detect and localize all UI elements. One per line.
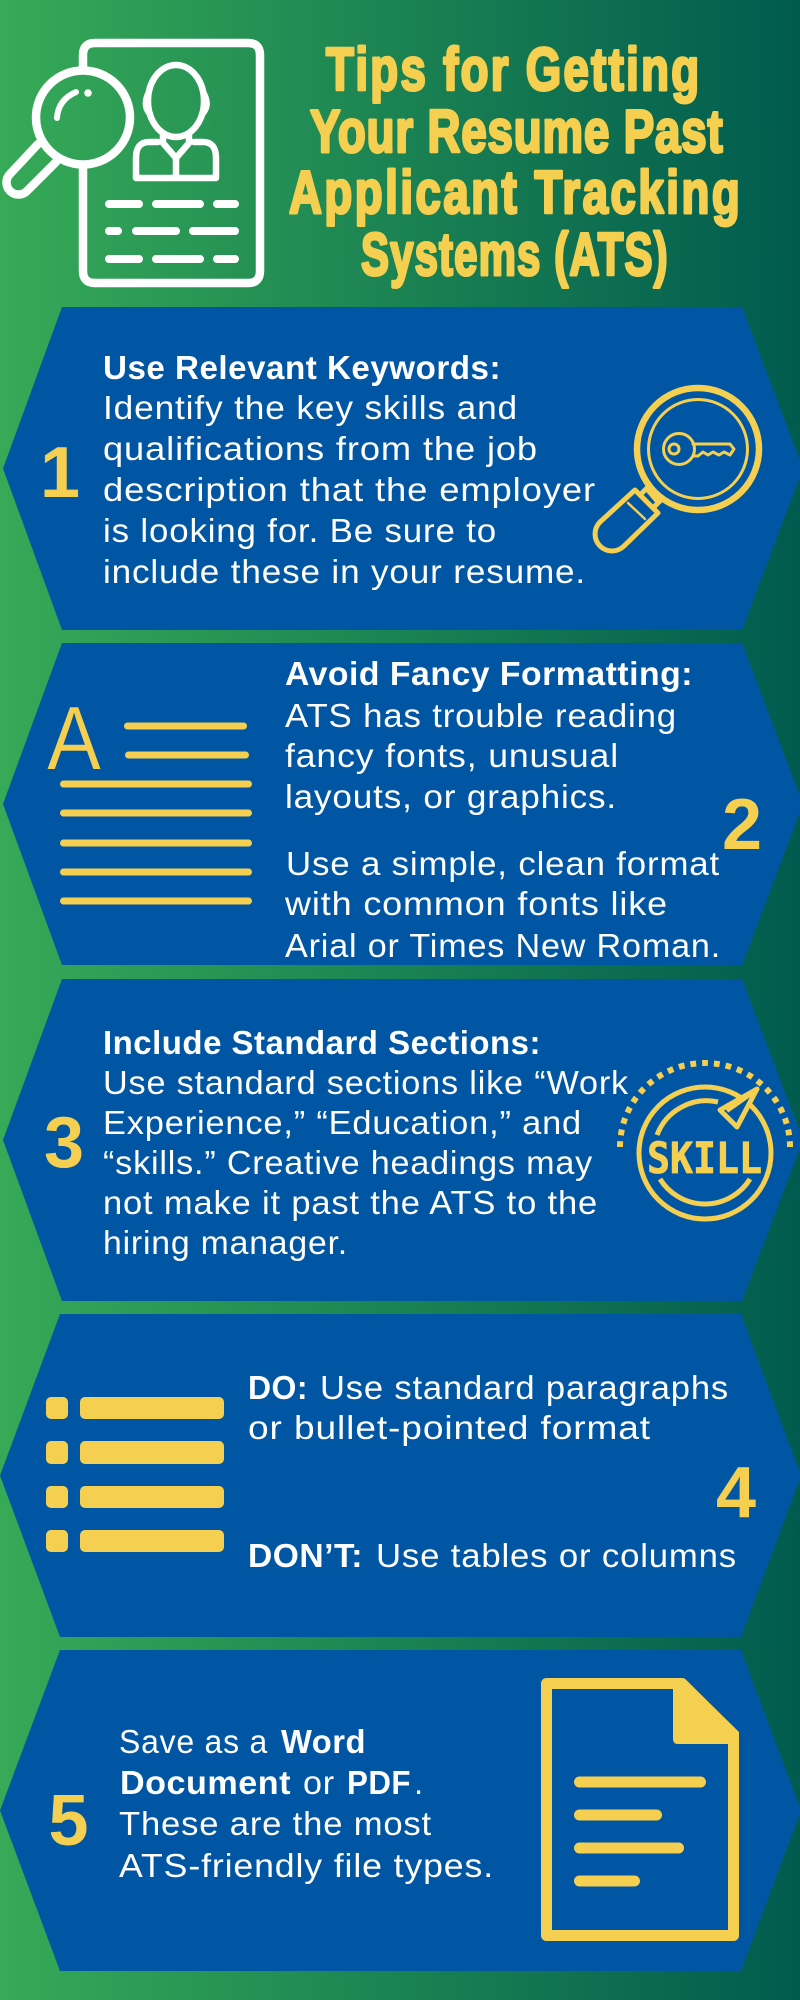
text: tip 1: qualifications from the job — [103, 430, 538, 467]
text: do: DO: — [248, 1369, 308, 1406]
text: tip 3: Include Standard Sections: — [103, 1024, 541, 1061]
text: do: or bullet-pointed format — [248, 1409, 651, 1446]
title: Your Resume Past — [310, 99, 723, 166]
icon: text lines with letter A — [47, 689, 248, 901]
text: tip 2: fancy fonts, unusual — [285, 737, 619, 774]
text: tip 1: Identify the key skills and — [103, 389, 518, 426]
text: don't: Use tables or columns — [376, 1537, 737, 1574]
title: Systems (ATS) — [361, 221, 668, 288]
number 5: 5 — [48, 1781, 89, 1861]
number 4: 4 — [716, 1453, 756, 1533]
icon: text lines with letter A: A — [47, 689, 101, 789]
icon: document — [546, 1680, 739, 1936]
text: tip 1 — [103, 349, 596, 590]
text: tip 2: with common fonts like — [284, 885, 668, 922]
text: tip 2 — [284, 655, 721, 964]
text: tip 3: hiring manager. — [103, 1224, 348, 1261]
icon: skill gauge — [620, 1063, 790, 1219]
title: Tips for Getting — [326, 37, 699, 104]
icon: bullet list — [46, 1397, 224, 1552]
text: tip 5: or — [303, 1764, 335, 1801]
text: tip 1: Use Relevant Keywords: — [103, 349, 501, 386]
text: tip 5: These are the most — [119, 1805, 432, 1842]
text: tip 5: . — [414, 1764, 424, 1801]
title — [289, 37, 740, 288]
panel 4 hexagon — [0, 1314, 800, 1637]
text: tip 3: not make it past the ATS to the — [103, 1184, 598, 1221]
panel 3 hexagon — [3, 979, 800, 1301]
text: tip 5: Save as a — [119, 1723, 268, 1760]
text: tip 2: Avoid Fancy Formatting: — [285, 655, 693, 692]
text: tip 2: Use a simple, clean format — [286, 845, 720, 882]
text: tip 5: PDF — [347, 1764, 411, 1801]
text: tip 5: ATS-friendly file types. — [119, 1847, 494, 1884]
panel 2 hexagon — [3, 643, 800, 965]
panel 5 hexagon — [0, 1650, 800, 1971]
icon: resume with magnifying glass — [6, 43, 260, 283]
text: tip 2: ATS has trouble reading — [285, 697, 677, 734]
text: tip 3 — [103, 1024, 629, 1261]
panel: tip 2 avoid fancy formatting — [3, 643, 800, 965]
text: tip 2: Arial or Times New Roman. — [285, 927, 721, 964]
text: do: Use standard paragraphs — [320, 1369, 729, 1406]
text: tip 3: Experience,” “Education,” and — [103, 1104, 582, 1141]
panel: tip 4 do and don't — [0, 1314, 800, 1637]
number 3: 3 — [44, 1103, 84, 1183]
number 1: 1 — [40, 433, 80, 513]
text: don't: DON’T: — [248, 1537, 363, 1574]
title: Applicant Tracking — [289, 160, 740, 227]
text: tip 1: include these in your resume. — [103, 553, 586, 590]
icon: skill gauge: SKILL — [647, 1134, 762, 1184]
panel 1 hexagon — [3, 307, 800, 630]
text: tip 5: Word — [281, 1723, 366, 1760]
number 2: 2 — [722, 785, 762, 865]
panel: tip 3 standard sections — [3, 979, 800, 1301]
text: tip 3: Use standard sections like “Work — [103, 1064, 629, 1101]
icon: magnifying glass with key — [595, 388, 759, 551]
text: tip 1: is looking for. Be sure to — [103, 512, 497, 549]
panel: tip 1 relevant keywords — [3, 307, 800, 630]
text: tip 3: “skills.” Creative headings may — [103, 1144, 593, 1181]
text: tip 1: description that the employer — [103, 471, 596, 508]
panel: tip 5 file types — [0, 1650, 800, 1971]
text: tip 2: layouts, or graphics. — [285, 778, 617, 815]
text: do — [248, 1369, 729, 1446]
text: tip 5: Document — [120, 1764, 291, 1801]
text: tip 5 — [119, 1723, 494, 1884]
